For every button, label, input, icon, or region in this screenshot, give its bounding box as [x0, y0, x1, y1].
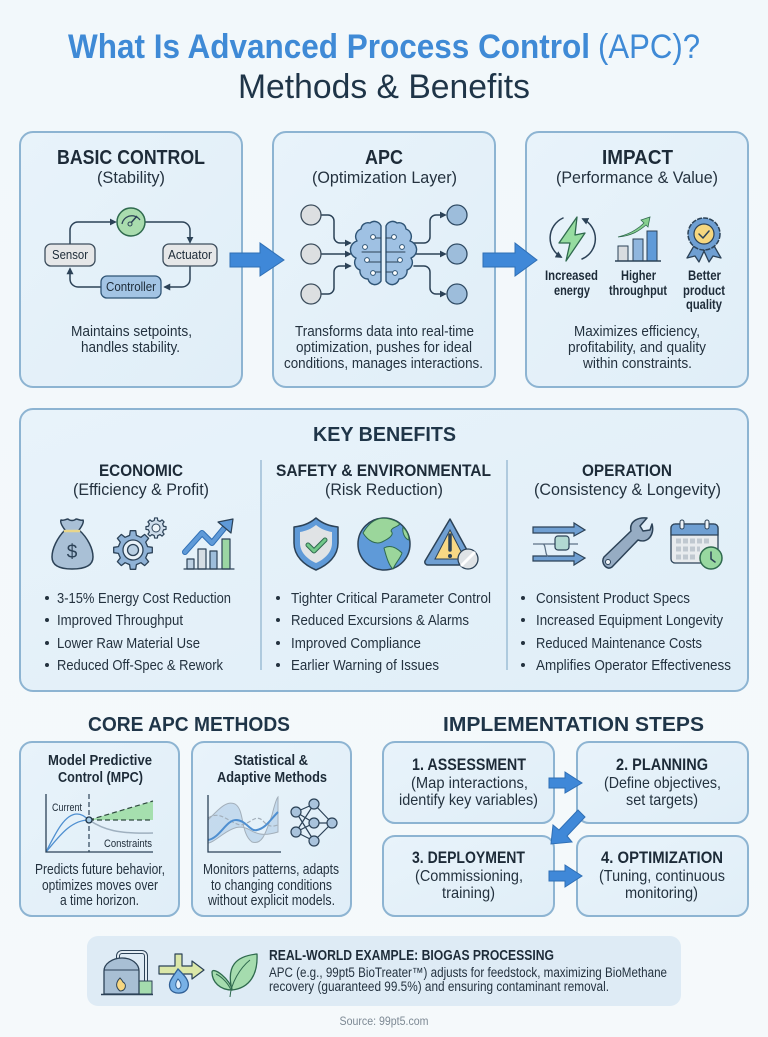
diagram: control loop: Actuator: [168, 248, 212, 262]
step 2: planning: [577, 742, 748, 823]
step 4: optimization: [577, 836, 748, 916]
economic list: Improved Throughput: [57, 613, 183, 629]
chart: MPC prediction: Constraints: [104, 838, 152, 850]
column: safety and environmental: SAFETY & ENVIRONMENTAL: [276, 461, 491, 480]
impact labels: Better: [688, 268, 722, 283]
subheading: stability: (Stability): [97, 168, 165, 187]
icon: warning triangle: [425, 519, 478, 569]
heading: MPC: Control (MPC): [58, 770, 143, 786]
diagram: control loop: [45, 208, 217, 298]
step 1: assessment: identify key variables): [399, 792, 538, 809]
arrow: APC to impact: [483, 243, 537, 276]
arrow: step 1 to step 2: [549, 772, 582, 793]
chart: MPC prediction: [46, 794, 153, 852]
step 3: deployment: 3. DEPLOYMENT: [412, 848, 526, 867]
example text: APC (e.g., 99pt5 BioTreater™) adjusts for feedstock, maximizing BioMethane: [269, 965, 667, 980]
description: optimization, pushes for ideal: [296, 340, 472, 356]
safety list: Improved Compliance: [291, 636, 421, 652]
step 1: assessment: (Map interactions,: [411, 775, 528, 792]
column: safety and environmental: (Risk Reduction): [325, 480, 443, 499]
title: Methods & Benefits: [238, 68, 530, 106]
description: conditions, manages interactions.: [284, 356, 483, 372]
description: to changing conditions: [211, 878, 332, 894]
economic list: 3-15% Energy Cost Reduction: [57, 591, 231, 607]
description: within constraints.: [582, 356, 692, 372]
heading: basic control: BASIC CONTROL: [57, 147, 205, 169]
icon: money bag: [52, 519, 93, 569]
step 4: optimization: monitoring): [625, 885, 698, 902]
icon: calendar with clock: [671, 520, 722, 569]
diagram: control loop: Sensor: [52, 248, 88, 262]
description: Monitors patterns, adapts: [203, 862, 339, 878]
heading: APC: APC: [365, 147, 403, 169]
panel: APC: [273, 132, 495, 387]
icon: leaves: [212, 954, 257, 997]
step 1: assessment: [383, 742, 554, 823]
heading: MPC: [48, 753, 152, 786]
heading: statistical: [217, 753, 327, 786]
arrow: step 2 to step 3: [551, 810, 585, 844]
description: optimizes moves over: [42, 878, 158, 894]
safety list: Reduced Excursions & Alarms: [291, 613, 469, 629]
step 3: deployment: (Commissioning,: [415, 868, 523, 885]
icon: energy bolt: [550, 217, 595, 261]
description: profitability, and quality: [568, 340, 707, 356]
column: economic: ECONOMIC: [99, 461, 183, 480]
panel: key benefits: [20, 409, 748, 691]
icon: biogas tank: [101, 952, 153, 994]
step 1: assessment: 1. ASSESSMENT: [412, 755, 527, 774]
subheading: performance and value: (Performance & Value): [556, 168, 718, 187]
impact labels: energy: [554, 283, 590, 298]
economic list: [45, 591, 231, 674]
description: [203, 862, 339, 909]
example text: recovery (guaranteed 99.5%) and ensuring contaminant removal.: [269, 979, 609, 994]
step 4: optimization: (Tuning, continuous: [599, 868, 725, 885]
description: Predicts future behavior,: [35, 862, 165, 878]
icon: globe: [358, 518, 410, 570]
icon: shield: [294, 518, 338, 570]
step 2: planning: set targets): [626, 792, 698, 809]
subheading: optimization layer: (Optimization Layer): [312, 168, 457, 187]
economic list: Reduced Off-Spec & Rework: [57, 658, 224, 674]
icon: gears: [114, 518, 166, 569]
step 3: deployment: [383, 836, 554, 916]
safety list: [276, 591, 491, 674]
diagram: brain with inputs and outputs: [301, 205, 467, 304]
description: handles stability.: [81, 340, 180, 356]
heading: statistical: Adaptive Methods: [217, 770, 327, 786]
impact labels: Higher: [621, 268, 657, 283]
icon: growth chart: [184, 519, 234, 569]
operation list: Reduced Maintenance Costs: [536, 636, 702, 652]
description: [284, 324, 483, 372]
title: (APC)?: [598, 28, 700, 66]
description: [568, 324, 707, 372]
column: operation: (Consistency & Longevity): [534, 480, 721, 499]
title: What Is Advanced Process Control: [68, 28, 590, 66]
heading: MPC: Model Predictive: [48, 753, 152, 769]
icon: money bag: $: [67, 542, 78, 563]
icon: throughput chart: [615, 217, 661, 261]
panel: statistical and adaptive methods: [192, 742, 351, 916]
chart: statistical band: [208, 795, 281, 852]
icon: quality ribbon: [687, 218, 721, 262]
impact labels: throughput: [609, 283, 667, 298]
heading: key benefits: KEY BENEFITS: [313, 424, 456, 446]
column: operation: [521, 461, 731, 674]
column: economic: (Efficiency & Profit): [73, 480, 209, 499]
economic list: Lower Raw Material Use: [57, 636, 200, 652]
icon: gas pipe and flame: [159, 954, 204, 993]
operation list: [521, 591, 731, 674]
description: Transforms data into real-time: [295, 324, 474, 340]
panel: impact: [526, 132, 748, 387]
impact labels: quality: [686, 297, 722, 312]
panel: basic control: [20, 132, 242, 387]
column: operation: OPERATION: [582, 461, 672, 480]
source note: Source: 99pt5.com: [340, 1014, 428, 1028]
arrow: step 3 to step 4: [549, 865, 582, 887]
step 2: planning: (Define objectives,: [604, 775, 721, 792]
description: Maximizes efficiency,: [574, 324, 700, 340]
step 3: deployment: training): [442, 885, 495, 902]
column: safety and environmental: [276, 461, 491, 674]
icon: wrench: [603, 518, 653, 568]
impact labels: Increased: [545, 268, 598, 283]
example text: [269, 948, 667, 994]
chart: MPC prediction: Current: [52, 802, 82, 814]
heading: impact: IMPACT: [602, 147, 673, 169]
operation list: Amplifies Operator Effectiveness: [536, 658, 731, 674]
description: [35, 862, 165, 909]
arrow: basic control to APC: [230, 243, 284, 276]
panel: real-world example: [87, 936, 681, 1006]
example text: REAL-WORLD EXAMPLE: BIOGAS PROCESSING: [269, 948, 554, 964]
panel: model predictive control: [20, 742, 179, 916]
diagram: control loop: Controller: [106, 280, 156, 294]
description: a time horizon.: [60, 893, 139, 909]
heading: statistical: Statistical &: [234, 753, 308, 769]
operation list: Increased Equipment Longevity: [536, 613, 724, 629]
heading: core APC methods: CORE APC METHODS: [88, 714, 290, 736]
column: economic: [45, 461, 234, 674]
description: Maintains setpoints,: [71, 324, 192, 340]
step 4: optimization: 4. OPTIMIZATION: [601, 848, 723, 867]
heading: implementation steps: IMPLEMENTATION STEPS: [443, 714, 704, 736]
description: [71, 324, 192, 356]
safety list: Tighter Critical Parameter Control: [291, 591, 491, 607]
title: [68, 28, 700, 106]
impact labels: [545, 268, 725, 312]
step 2: planning: 2. PLANNING: [616, 755, 708, 774]
safety list: Earlier Warning of Issues: [291, 658, 439, 674]
icon: neural network: [291, 799, 337, 846]
operation list: Consistent Product Specs: [536, 591, 690, 607]
description: without explicit models.: [207, 893, 335, 909]
icon: process flows: [533, 523, 585, 565]
impact labels: product: [683, 283, 725, 298]
